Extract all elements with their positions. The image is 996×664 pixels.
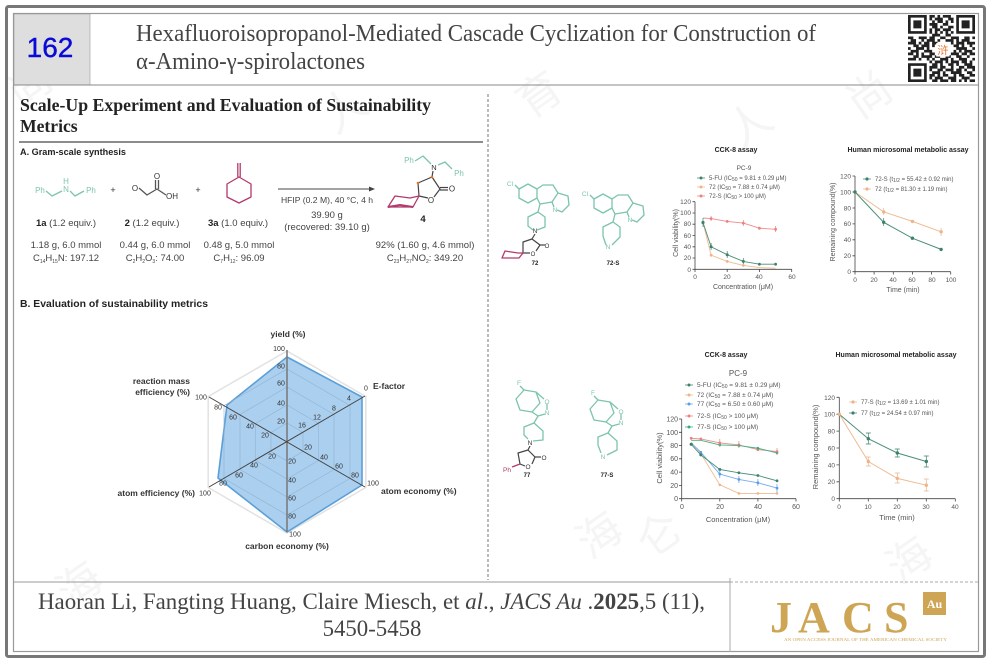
chart: microsomal metabolic assay (72): Time (min) bbox=[886, 287, 920, 294]
chart: CCK-8 assay (72): 40 bbox=[684, 244, 691, 251]
radar chart: 60 bbox=[288, 496, 296, 502]
radar chart: 0 bbox=[364, 386, 368, 392]
radar chart: 20 bbox=[304, 444, 312, 452]
legend: = 6.50 ± 0.60 μM) bbox=[720, 401, 773, 408]
chart: CCK-8 assay (77): 20 bbox=[670, 483, 678, 490]
chart: microsomal metabolic assay (77): 0 bbox=[837, 504, 841, 511]
issue number badge bbox=[14, 14, 90, 85]
labels and masses: 3 bbox=[152, 259, 155, 265]
molecule 77: O bbox=[541, 455, 547, 462]
legend: 1/2 bbox=[893, 178, 900, 184]
legend: 50 bbox=[721, 415, 727, 421]
legend bbox=[863, 177, 953, 194]
molecule 77: N bbox=[545, 410, 550, 417]
molecule 77: Ph bbox=[503, 467, 511, 474]
legend: 1/2 bbox=[887, 188, 894, 194]
title: α-Amino-γ-spirolactones bbox=[136, 49, 365, 75]
radar chart: 20 bbox=[277, 418, 285, 426]
legend bbox=[849, 400, 939, 418]
radar chart: 40 bbox=[288, 478, 296, 484]
radar chart: 80 bbox=[277, 364, 285, 370]
molecule 72: O bbox=[531, 252, 536, 258]
JACS Au logo bbox=[770, 592, 948, 642]
molecule 2 bbox=[132, 172, 178, 201]
legend: 50 bbox=[725, 186, 731, 192]
radar chart: 40 bbox=[277, 400, 285, 408]
chart: CCK-8 assay (72): Concentration (μM) bbox=[713, 284, 773, 291]
legend: > 100 μM) bbox=[737, 194, 766, 200]
legend: 50 bbox=[731, 195, 737, 201]
labels and masses: 0.48 g, 5.0 mmol bbox=[204, 240, 274, 251]
molecule 77-S: 77-S bbox=[601, 473, 613, 479]
chart: microsomal metabolic assay (72): 0 bbox=[847, 269, 851, 276]
radar chart: 16 bbox=[298, 422, 306, 430]
issue number badge: 162 bbox=[27, 32, 73, 63]
chart: CCK-8 assay (77): 120 bbox=[666, 416, 678, 424]
radar chart: 60 bbox=[335, 464, 343, 470]
labels and masses: H bbox=[135, 253, 142, 264]
molecule 72 bbox=[502, 181, 569, 267]
radar chart: efficiency (%) bbox=[135, 387, 190, 397]
legend: 77 (IC bbox=[697, 401, 715, 408]
radar chart: 60 bbox=[277, 380, 285, 388]
molecule 72: N bbox=[553, 207, 558, 214]
labels and masses: O bbox=[145, 253, 152, 264]
legend: 72-S (IC bbox=[697, 413, 721, 420]
chart: microsomal metabolic assay (72): Human microsomal metabolic assay bbox=[848, 147, 969, 154]
labels and masses: : 349.20 bbox=[429, 253, 463, 264]
legend: = 9.81 ± 0.29 μM) bbox=[738, 176, 787, 182]
panel B: sustainability metrics bbox=[20, 299, 457, 551]
labels and masses: : 96.09 bbox=[236, 253, 265, 264]
chart: CCK-8 assay (72): 120 bbox=[680, 199, 691, 206]
chart: CCK-8 assay (77) bbox=[655, 352, 800, 524]
labels and masses: 1a (1.2 equiv.) bbox=[36, 218, 96, 229]
labels and masses: C bbox=[126, 253, 133, 264]
QR code: 浒 bbox=[937, 44, 948, 57]
legend: = 55.42 ± 0.92 min) bbox=[900, 177, 953, 183]
molecule 1a: Ph bbox=[35, 186, 45, 195]
JACS Au logo: S bbox=[884, 593, 908, 642]
QR code bbox=[908, 16, 975, 81]
radar chart: 8 bbox=[332, 406, 336, 412]
text: 人 bbox=[711, 83, 783, 161]
labels and masses: 2 (1.2 equiv.) bbox=[125, 218, 179, 229]
text: 海 bbox=[41, 543, 113, 621]
chart: CCK-8 assay (72): 0 bbox=[687, 267, 691, 274]
labels and masses: 2 bbox=[426, 259, 429, 265]
radar chart: 80 bbox=[214, 404, 222, 412]
molecule 72: 72 bbox=[532, 261, 539, 267]
JACS Au logo: AN OPEN ACCESS JOURNAL OF THE AMERICAN CHEMICAL SOCIETY bbox=[784, 637, 948, 642]
radar chart: reaction mass bbox=[133, 376, 190, 386]
legend: 1/2 bbox=[879, 401, 886, 407]
chart: microsomal metabolic assay (77) bbox=[811, 352, 959, 522]
chart: CCK-8 assay (77): 20 bbox=[716, 504, 724, 511]
footer citation: 5450-5458 bbox=[323, 616, 421, 641]
product 4: N bbox=[431, 163, 437, 172]
radar chart: 20 bbox=[268, 454, 276, 460]
molecule 72-S bbox=[582, 191, 644, 267]
labels and masses bbox=[31, 214, 474, 265]
labels and masses: 23 bbox=[394, 259, 400, 265]
legend: > 100 μM) bbox=[727, 424, 758, 431]
legend: = 81.30 ± 1.19 min) bbox=[894, 187, 947, 193]
radar chart: 80 bbox=[288, 514, 296, 520]
labels and masses: 12 bbox=[230, 259, 236, 265]
chart: CCK-8 assay (77): 0 bbox=[674, 496, 678, 503]
section heading: Metrics bbox=[20, 116, 78, 136]
legend: = 24.54 ± 0.97 min) bbox=[880, 411, 933, 417]
legend: 1/2 bbox=[873, 412, 880, 418]
chart: CCK-8 assay (77): 80 bbox=[670, 443, 678, 450]
chart: CCK-8 assay (72): 20 bbox=[684, 255, 691, 262]
chart: microsomal metabolic assay (72): 80 bbox=[844, 206, 851, 212]
molecule 2: OH bbox=[166, 192, 178, 201]
radar chart: 80 bbox=[351, 472, 359, 480]
chart: CCK-8 assay (77): 100 bbox=[666, 430, 678, 437]
radar chart: atom efficiency (%) bbox=[118, 488, 195, 498]
chart: microsomal metabolic assay (72): 120 bbox=[840, 174, 851, 180]
labels and masses: H bbox=[399, 253, 406, 264]
chart: CCK-8 assay (77): 60 bbox=[670, 456, 678, 463]
chart: CCK-8 assay (77): CCK-8 assay bbox=[705, 352, 748, 359]
radar chart: 100 bbox=[367, 480, 379, 488]
molecule 3a bbox=[227, 163, 251, 203]
text: 尚 bbox=[831, 53, 903, 131]
chart: microsomal metabolic assay (72): 60 bbox=[844, 221, 851, 228]
labels and masses: H bbox=[223, 253, 230, 264]
labels and masses: 1.18 g, 6.0 mmol bbox=[31, 240, 101, 251]
legend bbox=[685, 382, 781, 432]
legend: 77-S (t bbox=[861, 400, 879, 406]
chart: CCK-8 assay (77): PC-9 bbox=[729, 369, 748, 378]
labels and masses: 27 bbox=[406, 259, 412, 265]
labels and masses: 7 bbox=[220, 259, 223, 265]
chart: CCK-8 assay (77): Cell viability(%) bbox=[655, 432, 664, 484]
reaction arrow and conditions: HFIP (0.2 M), 40 °C, 4 h bbox=[281, 195, 373, 205]
chart: microsomal metabolic assay (72): 20 bbox=[870, 277, 878, 284]
legend: 72 (IC bbox=[709, 185, 725, 191]
JACS Au logo: A bbox=[798, 593, 830, 642]
molecule 72-S: Cl bbox=[582, 191, 589, 198]
radar chart: 100 bbox=[273, 346, 285, 353]
chart: microsomal metabolic assay (77): 60 bbox=[828, 446, 835, 452]
legend: 50 bbox=[715, 394, 720, 400]
molecule 77: 77 bbox=[524, 473, 531, 479]
labels and masses: 4 bbox=[420, 214, 426, 225]
molecule 77-S: N bbox=[619, 420, 624, 427]
legend: 50 bbox=[722, 384, 728, 390]
chart: microsomal metabolic assay (77): 40 bbox=[828, 462, 835, 470]
chart: microsomal metabolic assay (77): 40 bbox=[951, 504, 959, 511]
chart: CCK-8 assay (72): 60 bbox=[684, 233, 691, 240]
legend: = 7.88 ± 0.74 μM) bbox=[720, 392, 773, 399]
product 4: Ph bbox=[454, 169, 464, 178]
product 4 bbox=[388, 156, 464, 207]
legend: = 9.81 ± 0.29 μM) bbox=[727, 382, 781, 389]
legend bbox=[697, 176, 787, 201]
molecule 77: O bbox=[544, 399, 550, 406]
radar chart: 40 bbox=[246, 424, 254, 430]
legend: > 100 μM) bbox=[727, 413, 758, 420]
header panel bbox=[14, 14, 979, 85]
legend: 50 bbox=[732, 177, 738, 183]
radar chart: 60 bbox=[229, 414, 237, 422]
chart: microsomal metabolic assay (77): Time (min) bbox=[879, 513, 915, 522]
footer dividers bbox=[14, 578, 979, 652]
text: 海 bbox=[561, 493, 633, 571]
molecule 77-S: F bbox=[591, 390, 595, 397]
molecule 72-S: N bbox=[628, 217, 633, 224]
radar chart: 100 bbox=[289, 532, 301, 538]
labels and masses: 92% (1.60 g, 4.6 mmol) bbox=[376, 240, 474, 251]
labels and masses: 15 bbox=[52, 259, 58, 265]
chart: microsomal metabolic assay (72): 100 bbox=[946, 277, 957, 284]
product 4: O bbox=[428, 196, 434, 205]
labels and masses: C bbox=[387, 253, 394, 264]
legend: 77-S (IC bbox=[697, 424, 721, 431]
legend: 72 (IC bbox=[697, 392, 715, 399]
chart: CCK-8 assay (72): 20 bbox=[723, 274, 731, 281]
radar chart: 60 bbox=[235, 472, 243, 480]
chart: microsomal metabolic assay (72): 0 bbox=[853, 277, 857, 284]
text: 育 bbox=[501, 53, 573, 131]
chart: microsomal metabolic assay (77): 100 bbox=[824, 412, 835, 418]
chart: microsomal metabolic assay (77): Remaining compound(%) bbox=[811, 404, 820, 489]
section heading bbox=[19, 95, 483, 142]
labels and masses: 2 bbox=[142, 259, 145, 265]
molecule 1a: N bbox=[63, 185, 69, 194]
labels and masses: 2 bbox=[133, 259, 136, 265]
legend: 50 bbox=[715, 403, 720, 409]
labels and masses: C bbox=[213, 253, 220, 264]
chart: microsomal metabolic assay (77): 80 bbox=[828, 428, 835, 436]
radar chart: atom economy (%) bbox=[381, 486, 457, 496]
labels and masses: 3a (1.0 equiv.) bbox=[208, 218, 268, 229]
molecule 1a: H bbox=[63, 177, 69, 186]
chart: microsomal metabolic assay (77): 30 bbox=[922, 504, 930, 511]
reaction arrow and conditions: 39.90 g bbox=[311, 210, 343, 221]
panel B heading: B. Evaluation of sustainability metrics bbox=[20, 299, 209, 310]
panel A: gram-scale synthesis bbox=[20, 147, 474, 265]
chart: CCK-8 assay (72): PC-9 bbox=[737, 165, 752, 172]
legend: 5-FU (IC bbox=[709, 176, 732, 182]
molecule 72-S: N bbox=[606, 244, 611, 251]
chart: microsomal metabolic assay (77): 20 bbox=[893, 504, 901, 511]
chart: microsomal metabolic assay (72): Remaining compound(%) bbox=[830, 183, 837, 261]
molecule 72: O bbox=[545, 244, 550, 250]
radar chart: 100 bbox=[195, 394, 207, 402]
chart: CCK-8 assay (77): Concentration (μM) bbox=[706, 515, 771, 524]
section heading: Scale-Up Experiment and Evaluation of Sustainability bbox=[20, 95, 431, 115]
labels and masses: 0.44 g, 6.0 mmol bbox=[120, 240, 190, 251]
footer citation: Haoran Li, Fangting Huang, Claire Miesch, et al., JACS Au .2025,5 (11), bbox=[38, 589, 705, 614]
chart: CCK-8 assay (72): CCK-8 assay bbox=[715, 147, 758, 154]
text: 仑 bbox=[621, 493, 693, 571]
molecule 77: O bbox=[525, 464, 531, 471]
JACS Au logo: J bbox=[770, 593, 792, 642]
chart: CCK-8 assay (77): 40 bbox=[754, 504, 762, 511]
chart: microsomal metabolic assay (77): Human microsomal metabolic assay bbox=[836, 352, 957, 359]
chart: CCK-8 assay (77): 60 bbox=[792, 504, 800, 511]
radar chart: 40 bbox=[250, 462, 258, 470]
chart: CCK-8 assay (77): 0 bbox=[680, 504, 684, 511]
chart: microsomal metabolic assay (77): 0 bbox=[831, 496, 835, 503]
text: 海 bbox=[871, 518, 943, 596]
chart: microsomal metabolic assay (72): 60 bbox=[908, 277, 916, 284]
legend: = 7.88 ± 0.74 μM) bbox=[731, 185, 780, 191]
chart: CCK-8 assay (72): Cell viability(%) bbox=[673, 209, 680, 257]
title: Hexafluoroisopropanol-Mediated Cascade Cyclization for Construction of bbox=[136, 21, 816, 47]
molecule 77: N bbox=[528, 440, 533, 447]
chart: CCK-8 assay (72) bbox=[673, 147, 796, 291]
radar chart: carbon economy (%) bbox=[245, 541, 329, 551]
labels and masses: C bbox=[33, 253, 40, 264]
JACS Au logo: Au bbox=[927, 597, 942, 611]
labels and masses: N: 197.12 bbox=[58, 253, 99, 264]
molecule 77-S: O bbox=[618, 409, 624, 416]
radar chart: 12 bbox=[313, 414, 321, 422]
chart: microsomal metabolic assay (77): 10 bbox=[864, 504, 872, 511]
chart: CCK-8 assay (72): 60 bbox=[788, 274, 796, 281]
legend: 72-S (t bbox=[875, 177, 893, 183]
chart: microsomal metabolic assay (72): 80 bbox=[928, 277, 936, 284]
molecule 77-S: N bbox=[601, 454, 606, 461]
radar chart: 80 bbox=[219, 480, 227, 488]
radar chart: E-factor bbox=[373, 381, 406, 391]
radar chart: 4 bbox=[347, 396, 351, 402]
molecule 1a bbox=[35, 177, 96, 196]
chart: microsomal metabolic assay (72): 40 bbox=[889, 277, 897, 284]
chart: microsomal metabolic assay (77): 120 bbox=[824, 395, 835, 402]
reaction arrow and conditions: (recovered: 39.10 g) bbox=[284, 222, 370, 233]
chart: CCK-8 assay (72): 80 bbox=[684, 221, 691, 228]
reaction arrow and conditions bbox=[278, 186, 375, 233]
panel A heading: A. Gram-scale synthesis bbox=[20, 147, 126, 157]
chart: microsomal metabolic assay (72): 20 bbox=[844, 253, 851, 260]
radar chart: 20 bbox=[288, 458, 296, 466]
radar chart bbox=[118, 329, 457, 551]
molecule 72-S: 72-S bbox=[607, 261, 619, 267]
legend: 72-S (IC bbox=[709, 194, 731, 200]
chart: CCK-8 assay (72): 100 bbox=[680, 210, 691, 217]
plus: + bbox=[110, 185, 116, 195]
chart: microsomal metabolic assay (72) bbox=[830, 147, 969, 294]
text: 人 bbox=[306, 68, 378, 146]
labels and masses: : 74.00 bbox=[155, 253, 184, 264]
product 4: O bbox=[449, 184, 455, 194]
radar chart: 40 bbox=[320, 454, 328, 462]
chart: CCK-8 assay (72): 40 bbox=[755, 274, 763, 281]
molecule 77 bbox=[503, 380, 550, 479]
radar chart: 20 bbox=[261, 432, 269, 440]
labels and masses: 14 bbox=[40, 259, 46, 265]
molecule 1a: Ph bbox=[86, 186, 96, 195]
legend: 77 (t bbox=[861, 411, 873, 417]
chart: CCK-8 assay (72): 0 bbox=[693, 274, 697, 281]
molecule 77: F bbox=[517, 380, 521, 387]
legend: 5-FU (IC bbox=[697, 382, 722, 389]
product 4: Ph bbox=[404, 156, 414, 165]
molecule 72: Cl bbox=[507, 181, 514, 188]
molecule 2: O bbox=[154, 172, 160, 181]
labels and masses: NO bbox=[412, 253, 426, 264]
labels and masses: H bbox=[45, 253, 52, 264]
chart: microsomal metabolic assay (72): 100 bbox=[840, 190, 851, 196]
molecule 77-S bbox=[590, 390, 624, 479]
footer citation bbox=[38, 589, 705, 641]
radar chart: 100 bbox=[199, 490, 211, 498]
chart: microsomal metabolic assay (72): 40 bbox=[844, 237, 851, 244]
molecule 2: O bbox=[132, 184, 138, 193]
legend: 72 (t bbox=[875, 187, 887, 193]
chart: microsomal metabolic assay (77): 20 bbox=[828, 479, 835, 486]
legend: 50 bbox=[721, 426, 727, 432]
dashed column divider bbox=[487, 94, 489, 580]
legend: = 13.69 ± 1.01 min) bbox=[886, 400, 939, 406]
chart: CCK-8 assay (77): 40 bbox=[670, 470, 678, 476]
radar chart: yield (%) bbox=[271, 329, 306, 339]
JACS Au logo: C bbox=[842, 593, 874, 642]
plus: + bbox=[195, 185, 201, 195]
molecule 72: N bbox=[533, 228, 538, 235]
